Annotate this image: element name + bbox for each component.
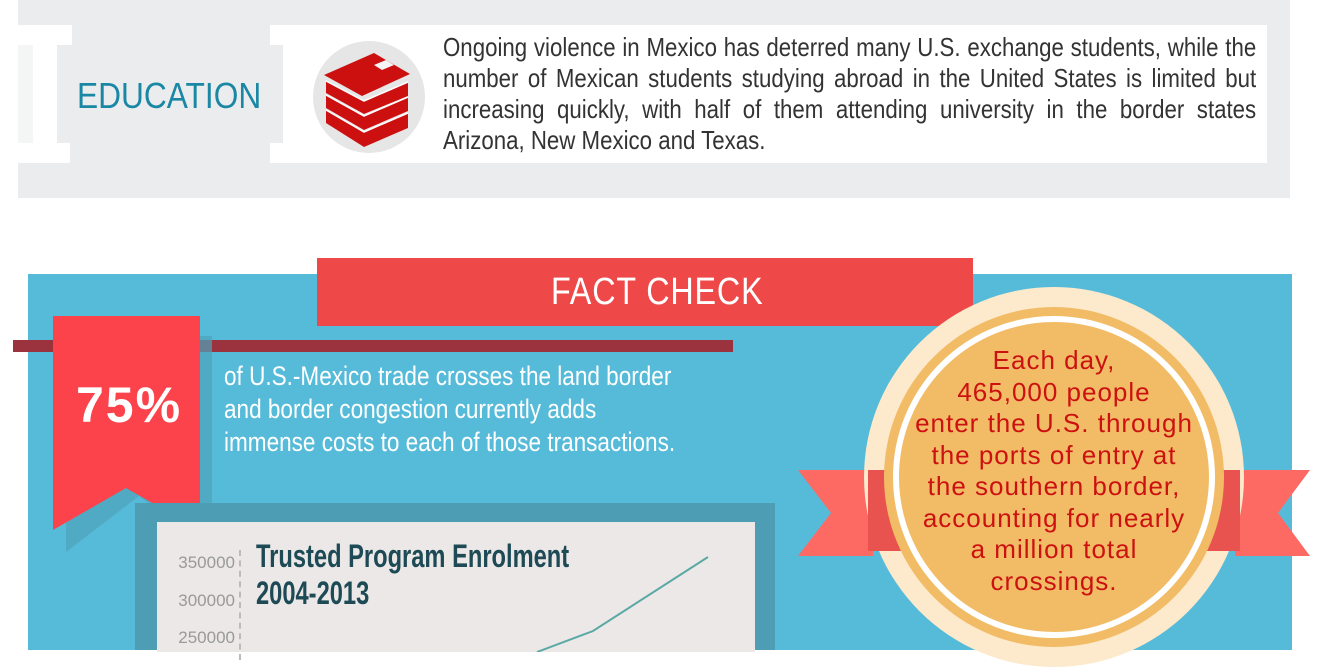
text block: crossings: 465,000 people [957,376,1151,406]
decorative bracket left [18,25,72,163]
decorative bar [13,340,733,352]
panel: education [18,0,1290,198]
y axis labels: 250000 [178,628,235,647]
y axis labels: 350000 [178,553,235,572]
text block: crossings: a million total [971,534,1137,564]
text block: trade: of U.S.-Mexico trade crosses the land border and border congestion currently adds immense costs to each of those transactions. [224,361,675,457]
text box [270,25,1267,163]
heading: fact check banner [317,258,973,326]
y axis labels: 300000 [178,590,235,610]
heading: fact check banner: FACT CHECK [551,271,764,313]
text block: education description: Ongoing violence in Mexico has deterred many U.S. exchange students, while the number of Mexican students studying abroad in the United States is limited but increasing quickly, with half of them attending university in the border states Arizona, New Mexico and Texas. [443,32,1256,155]
text block: crossings: accounting for nearly [923,502,1185,532]
ribbon: 75% [53,316,212,552]
chart: trusted program enrolment [135,503,775,650]
text block: crossings: Each day, [993,345,1115,375]
panel: fact check [28,274,1292,650]
text block: crossings: the southern border, [928,471,1180,501]
chart title [256,538,569,611]
text block: crossings [915,345,1193,596]
text block: crossings: the ports of entry at [931,440,1176,470]
stat: 75%: 75% [76,377,182,433]
heading: education: EDUCATION [77,75,261,116]
text block: crossings: enter the U.S. through [915,408,1193,438]
chart title: Trusted Program Enrolment [256,538,569,574]
y axis labels [178,553,235,647]
icon: books [313,41,425,153]
line series [536,556,708,652]
text block: crossings: crossings. [990,566,1118,596]
callout: daily crossings badge [798,287,1310,667]
chart title: 2004-2013 [256,575,369,611]
